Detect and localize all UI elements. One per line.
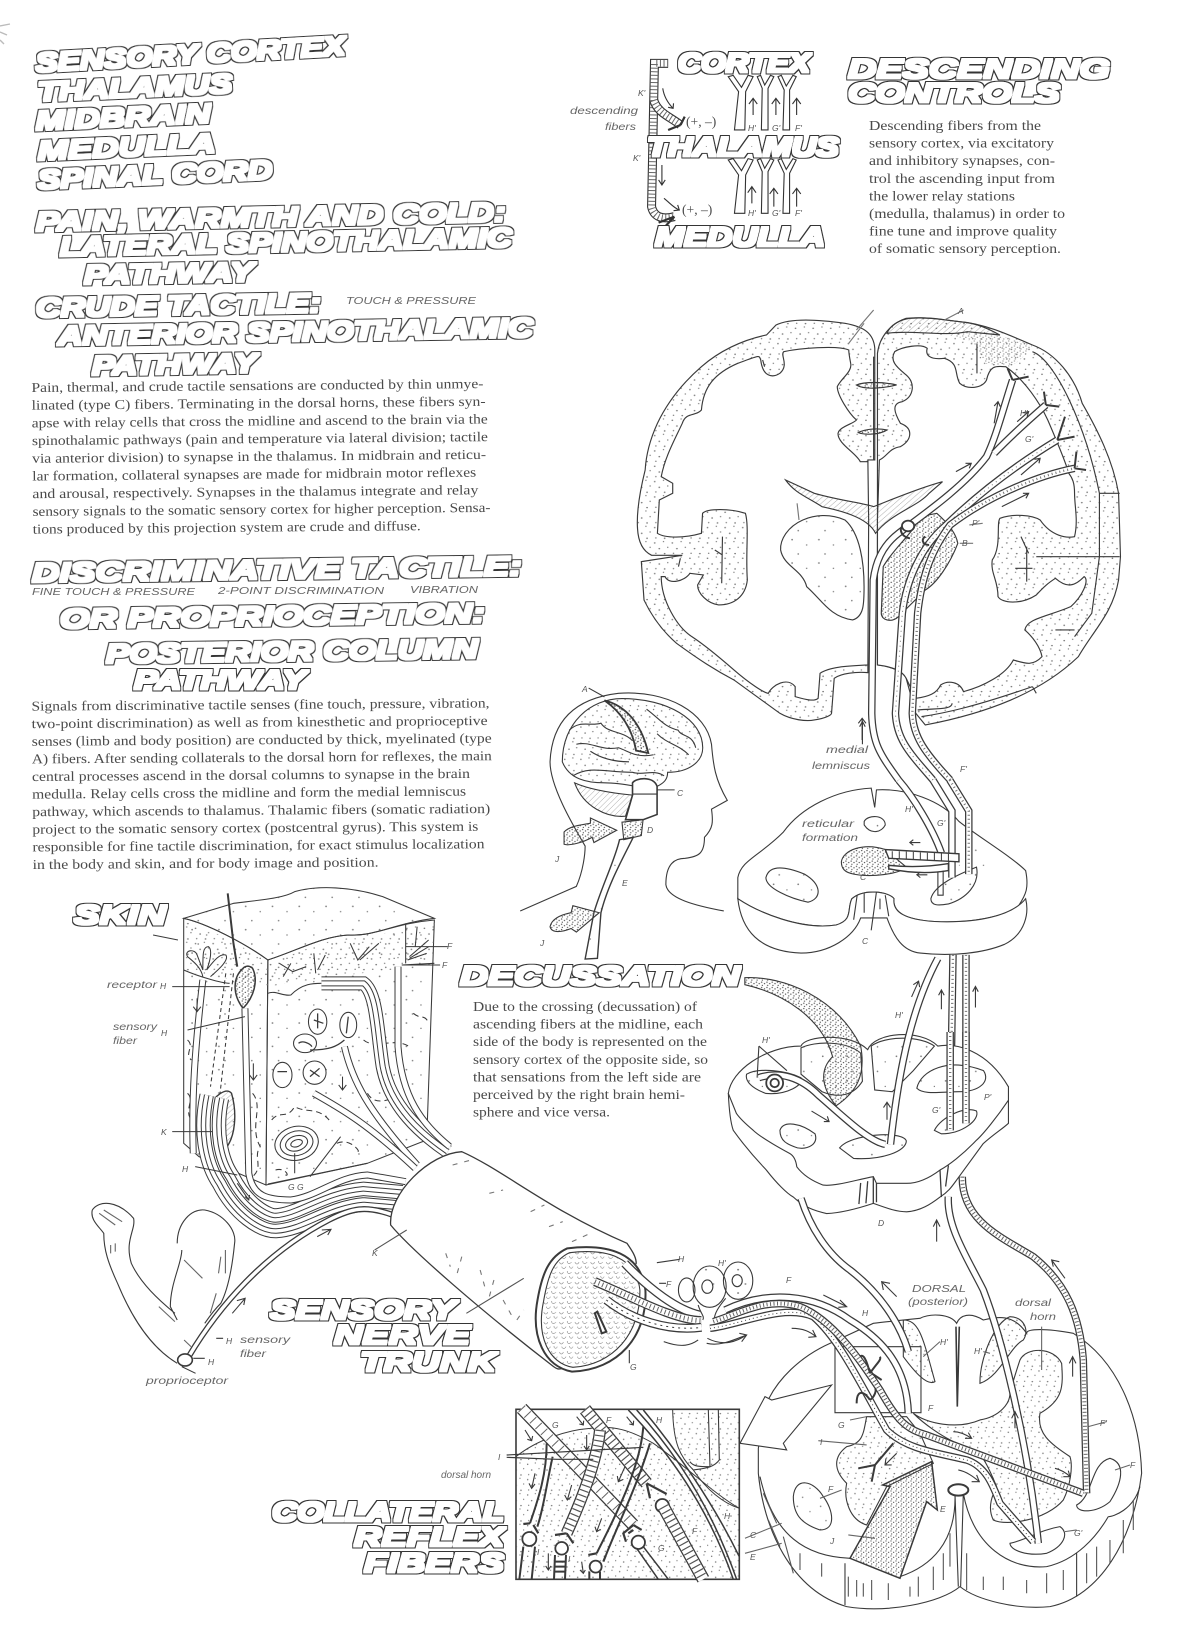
fibre arrows [858,402,1040,740]
heading: collateral reflex fibers: COLLATERAL [272,1497,504,1527]
text block: decussation [473,999,708,1120]
thalamocortical fibres [872,380,1075,780]
labels: descending schematic: H' [748,208,756,218]
text block: decussation: ascending fibers at the midline, each [473,1017,703,1032]
ventral hatching [763,1493,1133,1600]
labels: descending schematic: (+, –) [682,202,712,218]
collateral 1 [530,1443,553,1527]
labels: spinal cord: C [750,1530,757,1540]
subtitle: touch and pressure: TOUCH & PRESSURE [346,295,477,307]
labels: midbrain and medulla: C [677,788,684,798]
text block: decussation: perceived by the right brain hemi- [473,1087,686,1102]
labels: trunk and arm: H' [718,1258,726,1268]
labels: inset: G [658,1543,665,1553]
labels: inset: I [537,1547,540,1557]
medulla inner nuclei [746,1038,986,1159]
text block: descending controls: the lower relay stations [869,188,1015,203]
medulla block [622,820,643,840]
medulla slice top surface [728,1035,1008,1185]
labels: skin: G G [288,1182,304,1192]
labels: spinal cord: E [750,1552,756,1562]
hair [228,893,237,967]
scan smudge [0,24,10,44]
labels: midbrain and medulla: J [539,938,545,948]
text block: posterior column paragraph: two-point discrimination) as well as from kinesthetic and proprioceptive [32,713,488,732]
heading: pain, warmth and cold: LATERAL SPINOTHALAMIC [59,223,513,262]
somatic cortex dense band [944,333,1032,367]
labels: midbrain and medulla: P' [984,1092,992,1102]
epidermis stipple [184,922,434,987]
ventral nucleus right F [1077,1458,1121,1511]
labels: spinal cord: F' [1100,1418,1107,1428]
cerebellum [575,783,633,816]
labels: spinal cord [750,1218,1136,1562]
ascending Y tubes lower [728,159,796,213]
labels: trunk and arm: sensory [240,1334,291,1346]
labels: inset: H [656,1415,663,1425]
heading: decussation: DECUSSATION [460,961,741,991]
text block: pain pathway paragraph: lar formation, collateral synapses are made for midbrain motor reflexes [32,465,476,483]
labels: trunk and arm: G [630,1362,637,1372]
labels: skin: H [161,1028,168,1038]
labels: skin: H [182,1164,189,1174]
afferent arrow lower [550,906,599,932]
labels: spinal cord: F [1130,1460,1136,1470]
magnified region box [835,1347,921,1413]
postcentral gyrus strip [604,700,648,753]
text block: descending controls: trol the ascending input from [869,171,1055,186]
text block: descending controls [869,118,1065,256]
right hemisphere cortex band [877,318,1120,725]
labels: descending schematic: K' [638,88,646,98]
heading group: anatomical levels: THALAMUS [37,69,233,107]
text block: pain pathway paragraph [31,376,491,537]
H tubes [628,1410,739,1579]
midbrain slice base [738,892,1027,954]
encapsulated corpuscle [235,966,255,1008]
text block: descending controls: (medulla, thalamus) in order to [869,206,1065,222]
diagram: coronal brain section [637,310,1120,780]
labels: skin: F [442,960,448,970]
labels: trunk and arm: F [786,1275,792,1285]
heading: collateral reflex fibers: FIBERS [364,1548,504,1578]
left gray matter [837,1417,933,1525]
gyri [569,709,696,776]
labels: descending schematic: G' [772,123,781,133]
labels: spinal cord: F [828,1484,834,1494]
beaded F fibre [585,1409,647,1483]
labels: midbrain and medulla: C [862,936,869,946]
gray matter stipple [516,1427,739,1579]
labels: midbrain and medulla: formation [802,832,858,844]
diagram: skin block [153,888,450,1223]
text block: descending controls: fine tune and improve quality [869,224,1057,239]
heading: descending controls [848,54,1110,108]
labels: descending schematic: (+, –) [686,114,716,130]
labels: inset: H [724,1511,731,1521]
labels: midbrain and medulla: G' [937,818,946,828]
ventral nucleus G [1010,1527,1065,1554]
labels: spinal cord: H [862,1308,869,1318]
collateral 3 [597,1427,650,1555]
trunk shading [446,1160,590,1320]
labels: midbrain and medulla: reticular [802,818,855,830]
glands [268,1009,357,1167]
heading: cortex thalamus medulla: MEDULLA [655,222,825,252]
diagram: head with brain and spinal cord [520,688,1027,1214]
neck arrows [882,1220,1065,1297]
text block: decussation: side of the body is represented on the [473,1034,707,1049]
text block: posterior column paragraph: medulla. Relay cells cross the midline and form the medial lemniscus [32,784,466,802]
labels: inset: I [568,1554,571,1564]
heading: posterior column pathway: PATHWAY [134,665,310,695]
labels: inset: F [692,1526,698,1536]
text block: decussation: that sensations from the left side are [473,1069,701,1084]
dermal squiggles [188,1013,429,1177]
text block: pain pathway paragraph: Pain, thermal, and crude tactile sensations are conducted by thin unmye- [31,376,484,395]
text block: pain pathway paragraph: via anterior division) to synapse in the thalamus. In midbrain and reticu- [32,447,487,467]
text block: posterior column paragraph: Signals from discriminative tactile senses (fine touch, pressure, vibration, [31,695,490,715]
dorsal fissure [956,1327,959,1407]
afferent arrow upper [564,818,617,845]
arm outline [92,1203,235,1363]
small arrows [525,1417,634,1573]
thalamus nucleus [881,513,958,620]
labels: trunk and arm: H [226,1336,233,1346]
text block: posterior column paragraph: in the body and skin, and for body image and position. [33,855,379,872]
cerebrum [562,699,703,789]
labels: midbrain and medulla [539,684,992,1115]
brainstem [626,779,657,820]
labels: brain: lemniscus [812,760,871,772]
sensory cortex hatch [887,318,1000,335]
hair follicle ending [210,973,226,1087]
ascending Y tubes upper [728,75,796,130]
labels: inset: F [606,1415,612,1425]
receptor endings [187,923,429,977]
labels: midbrain and medulla: J [554,854,560,864]
reticular formation [841,847,906,875]
medial fissure lobes [856,382,897,434]
labels: spinal cord: F [928,1403,934,1413]
heading: posterior column pathway: POSTERIOR COLUMN [106,634,479,669]
labels: brain: F' [960,764,967,774]
labels: descending schematic: F' [795,208,802,218]
heading: descending controls: DESCENDING [848,54,1110,84]
labels: skin: fiber [113,1035,138,1047]
text block: descending controls: and inhibitory synapses, con- [869,153,1056,168]
midbrain nuclei [766,817,998,905]
labels: inset: I [498,1452,501,1462]
labels: midbrain and medulla: E [622,878,628,888]
heading: posterior column pathway [60,598,485,695]
labels: trunk and arm [145,1248,792,1387]
heading group: anatomical levels: MEDULLA [37,128,216,166]
labels: inset: dorsal horn [441,1469,491,1481]
labels: brain: medial [826,744,869,756]
heading: pain, warmth and cold: PATHWAY [84,257,258,290]
midbrain fibres [885,780,969,895]
white matter arcs [760,1477,1140,1605]
subtitle row: discriminative senses: 2-POINT DISCRIMINATION [217,585,385,597]
heading: descending controls: CONTROLS [848,78,1060,108]
tracts below midbrain [950,955,966,1130]
labels: midbrain and medulla: C [860,872,867,882]
cord outline [758,1315,1142,1609]
section arrows [707,1295,1076,1482]
text block: posterior column paragraph: A) fibers. After sending collaterals to the dorsal horn for reflexes, the main [32,748,492,767]
head profile [520,693,727,911]
labels: trunk and arm: proprioceptor [145,1375,229,1387]
heading: crude tactile: CRUDE TACTILE: [36,288,321,323]
labels: spinal cord: J [829,1536,835,1546]
collateral forks [857,1356,893,1482]
lead line I [507,1447,643,1459]
left hemisphere white matter [657,347,869,700]
labels: descending schematic: F' [795,123,802,133]
heading: sensory nerve trunk [270,1295,500,1377]
nerve fascicles [541,1252,640,1367]
labels: trunk and arm: fiber [240,1348,267,1360]
trunk cut face [536,1247,646,1372]
labels: spinal cord: G [838,1420,845,1430]
ventricle wings [786,480,943,533]
heading: posterior column pathway: OR PROPRIOCEPTION: [60,598,485,634]
labels: skin: H [160,981,167,991]
labels: brain [812,306,1034,774]
median slit hatching [859,1165,948,1204]
labels: spinal cord: H' [940,1337,948,1347]
afferent tract fibres [710,1177,1087,1543]
labels: skin: sensory [113,1021,158,1033]
aqueduct hatching [854,892,889,930]
dorsal column left [903,1320,935,1383]
diagram: spinal cord cross-section [707,1177,1142,1609]
left hemisphere cortex band [637,320,875,721]
dorsal root ganglia [678,1262,753,1307]
decussation pointer band [745,978,862,1106]
labels: descending schematic [570,88,802,218]
large arrow J [850,1462,937,1578]
subtitle row: discriminative senses: FINE TOUCH & PRESSURE [32,586,196,598]
heading: sensory nerve trunk: TRUNK [360,1347,500,1377]
labels: trunk and arm: H [678,1254,685,1264]
right hemisphere white matter [877,346,1086,698]
text block: pain pathway paragraph: sensory signals to the somatic sensory cortex for higher perception. Sensa- [32,500,491,519]
heading: sensory nerve trunk: SENSORY [270,1295,460,1325]
text block: pain pathway paragraph: tions produced by this projection system are crude and diffuse. [33,518,421,537]
labels: skin: receptor [107,979,158,991]
trunk body [391,1152,636,1369]
heading: collateral reflex fibers: REFLEX [354,1522,507,1552]
labels: descending schematic: G' [772,208,781,218]
labels: descending schematic: descending [570,105,638,117]
text block: decussation: Due to the crossing (decussation) of [473,999,698,1015]
labels: skin: F [447,941,453,951]
skin left face [184,918,268,1185]
labels: trunk and arm: H [208,1357,215,1367]
heading: crude tactile: PATHWAY [92,348,261,381]
labels: brain: A [957,306,964,316]
labels: midbrain and medulla: A [581,684,588,694]
spinal cord [585,837,633,959]
labels: brain: H' [1020,408,1028,418]
skin right face [266,920,434,1185]
synapse ring [902,521,914,531]
heading: sensory nerve trunk: NERVE [334,1320,471,1350]
labels: brain: P' [972,518,980,528]
text block: posterior column paragraph: senses (limb and body position) are conducted by thick, myelinated (type [32,731,492,750]
labels: spinal cord: D [878,1218,884,1228]
skin top surface [184,888,434,960]
collateral 2 [567,1430,600,1533]
terminal forks and relay cells [901,368,1086,545]
labels: skin: K [161,1127,167,1137]
labels: midbrain and medulla: H' [762,1035,770,1045]
descending beaded fibre [652,63,685,230]
right gray matter [913,1350,1071,1522]
emerging roots [595,1259,746,1363]
heading group: anatomical levels: MIDBRAIN [35,98,212,136]
text block: decussation: sensory cortex of the opposite side, so [473,1052,708,1067]
text block: descending controls: sensory cortex, via excitatory [869,136,1054,151]
text block: posterior column paragraph: pathway, which ascends to thalamus. Thalamic fibers (somatic radiation) [32,801,490,820]
heading: skin: SKIN [74,900,167,930]
deep corpuscles [208,1091,235,1148]
proprioceptive fibre [178,1209,393,1373]
labels: descending schematic: K' [633,153,641,163]
heading: cortex thalamus medulla: THALAMUS [647,132,839,162]
text block: posterior column paragraph: project to the somatic sensory cortex (postcentral gyrus). This system is [32,819,478,838]
subtitle row: discriminative senses [32,584,479,598]
labels: spinal cord: (posterior) [908,1296,968,1308]
text block: pain pathway paragraph: linated (type C) fibers. Terminating in the dorsal horns, these fibers syn- [32,394,486,414]
labels: trunk and arm: K [372,1248,378,1258]
text block: descending controls: of somatic sensory perception. [869,241,1061,256]
labels: brain: G' [1025,434,1034,444]
heading: crude tactile: ANTERIOR SPINOTHALAMIC [56,313,534,351]
text block: pain pathway paragraph: spinothalamic pathways (pain and temperature via lateral division; tactile [32,429,488,449]
dermis boundary [184,963,434,995]
heading: cortex thalamus medulla [647,48,839,252]
labels: trunk and arm: F [666,1279,672,1289]
text block: pain pathway paragraph: apse with relay cells that cross the midline and ascend to the brain via the [32,411,488,430]
labels: inset [441,1415,731,1564]
heading: pain, warmth and cold: PAIN, WARMTH AND COLD: [35,197,506,237]
medulla slice side wall [728,1087,1008,1214]
diagram: nerve trunk with arm [92,1152,753,1373]
labels: descending schematic: H' [748,123,756,133]
upper right stipple panel [673,1409,739,1508]
inset frame [516,1409,739,1579]
diagram: descending controls schematic [652,63,801,230]
text block: posterior column paragraph: central processes ascend in the dorsal columns to synapse in the brain [32,766,470,784]
labels: spinal cord: H' [974,1346,982,1356]
lobe fissures [678,360,1075,630]
heading: discriminative tactile: DISCRIMINATIVE TACTILE: [32,551,522,588]
labels: spinal cord: DORSAL [912,1283,966,1295]
text block: decussation: sphere and vice versa. [473,1105,610,1120]
labels: skin [107,941,453,1192]
small arrows [659,88,801,211]
heading group: anatomical levels: SPINAL CORD [37,155,273,195]
lentiform nucleus [781,516,864,620]
central canal [948,1484,968,1496]
magnify arrow [740,1385,832,1450]
heading group: anatomical levels: SENSORY CORTEX [35,31,348,78]
labels: spinal cord: I [820,1437,823,1447]
G terminal [623,1525,642,1542]
heading group: anatomical levels [35,31,348,195]
inset: magnified dorsal horn collaterals [507,1408,739,1579]
labels: inset: G [552,1420,559,1430]
text block: descending controls: Descending fibers from the [869,118,1041,133]
text block: posterior column paragraph [31,695,493,872]
labels: spinal cord: G' [1074,1528,1083,1538]
ventral nucleus left [793,1483,832,1530]
labels: midbrain and medulla: H' [905,804,913,814]
subtitle row: discriminative senses: VIBRATION [410,584,479,596]
heading: cortex thalamus medulla: CORTEX [678,48,812,78]
cortical layer lines [874,343,1120,717]
text block: pain pathway paragraph: and arousal, respectively. Synapses in the thalamus integrate and relay [32,482,479,501]
F terminal [647,1483,667,1498]
gland ducts [277,1013,348,1077]
diagonal G tube [522,1408,633,1525]
text block: posterior column paragraph: responsible for fine tactile discrimination, for exact stimulus localization [32,836,485,854]
heading: pain, warmth and cold [35,197,513,290]
afferent fibre bundles [193,967,450,1223]
labels: midbrain and medulla: D [647,825,653,835]
labels: midbrain and medulla: H' [895,1010,903,1020]
labels: spinal cord: horn [1030,1311,1056,1323]
labels: spinal cord: E [940,1504,946,1514]
dorsal column right [980,1317,1026,1383]
decussating fibres [759,958,966,1144]
labels: brain: B [962,538,968,548]
labels: midbrain and medulla: G' [932,1105,941,1115]
heading: collateral reflex fibers [272,1497,507,1578]
midbrain slice [738,788,1027,926]
heading: crude tactile [36,288,534,381]
labels: descending schematic: fibers [605,121,637,133]
labels: spinal cord: dorsal [1015,1297,1052,1309]
